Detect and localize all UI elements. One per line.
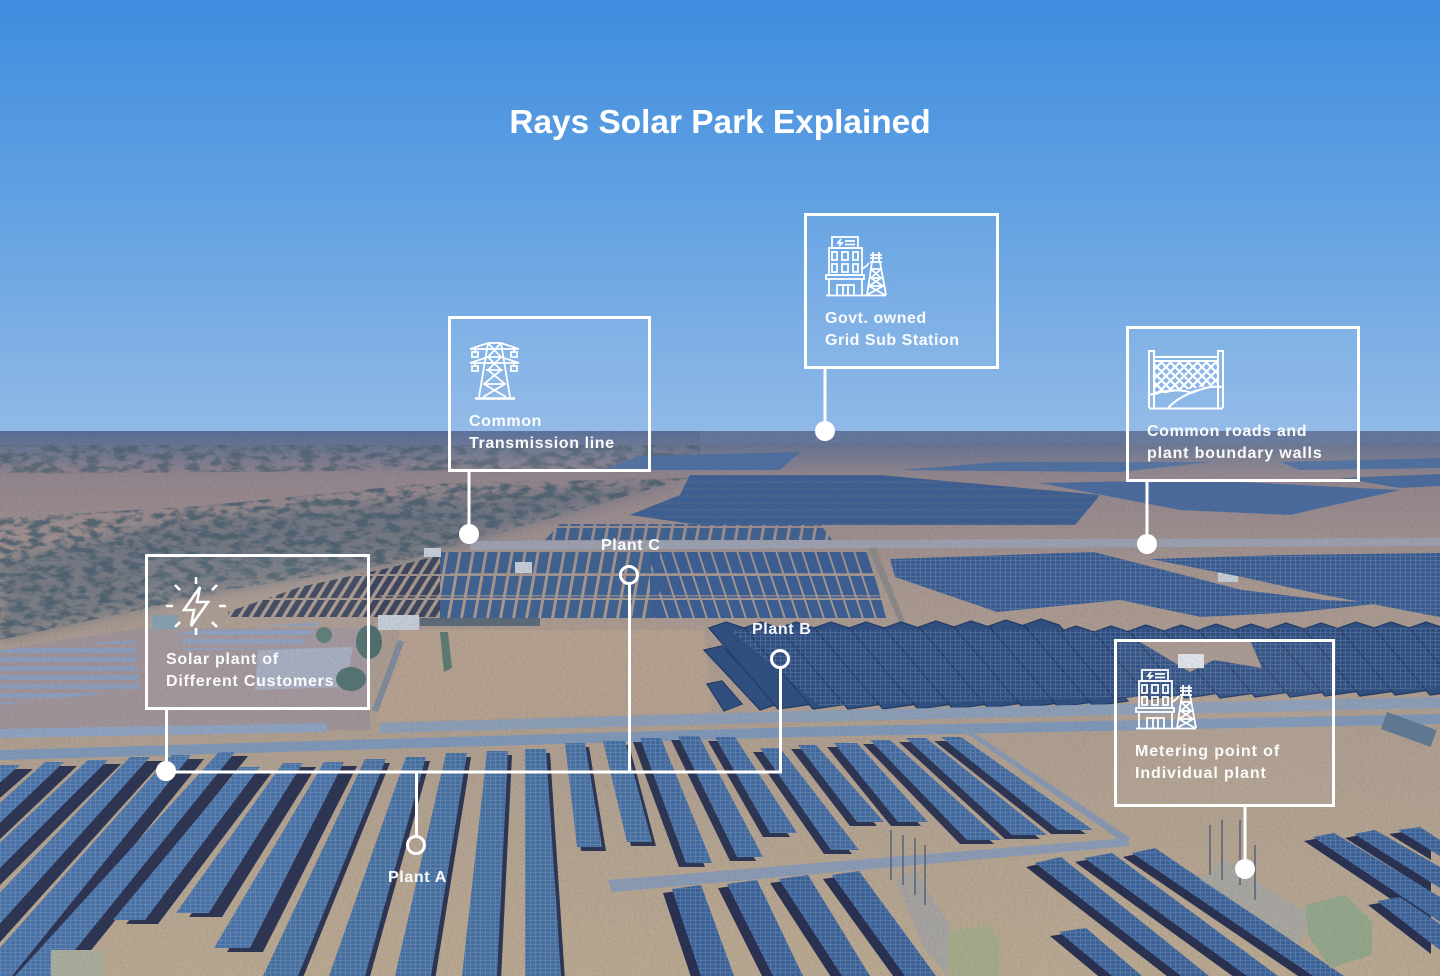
tree belt <box>0 470 700 640</box>
boundary walls <box>0 697 1440 892</box>
text: solar plant of different customers: Different Customers <box>166 673 334 690</box>
connector: plant network <box>156 566 788 854</box>
far solar fields <box>545 474 1440 540</box>
panel: common roads and boundary walls <box>1128 328 1358 480</box>
icon: substation building <box>826 237 886 296</box>
text: common roads and boundary walls: plant boundary walls <box>1147 445 1323 462</box>
connector: metering point <box>1235 807 1255 879</box>
icon: lightning bolt with rays <box>166 577 226 635</box>
icon: fence with lattice <box>1149 351 1223 408</box>
text: common transmission line: Transmission line <box>469 435 615 452</box>
node: plant A <box>408 836 424 854</box>
icon: metering building <box>1136 670 1196 728</box>
plant B array <box>704 619 1440 711</box>
panel: common transmission line <box>450 318 650 470</box>
text: metering point of individual plant: Individual plant <box>1135 765 1267 782</box>
label: plant B: Plant B <box>752 621 811 638</box>
node: plant C <box>620 566 638 584</box>
label: plant A: Plant A <box>388 869 447 886</box>
text: common roads and boundary walls: Common roads and <box>1147 423 1307 440</box>
title: Rays Solar Park Explained <box>509 104 931 141</box>
panel: solar plant of different customers <box>146 556 368 708</box>
left service yard <box>0 615 382 730</box>
ground <box>0 431 1440 976</box>
connector: roads and walls <box>1137 482 1157 554</box>
sand yard <box>375 630 712 722</box>
front solar rows with shadows <box>0 756 357 976</box>
connector: transmission line <box>459 472 479 544</box>
text: govt grid sub station: Govt. owned <box>825 310 927 327</box>
sky background <box>0 0 1440 432</box>
panel: metering point of individual plant <box>1116 640 1334 806</box>
aerial photo of solar park <box>0 431 1440 976</box>
connector: grid sub station <box>815 369 835 441</box>
substations <box>51 820 1372 976</box>
horizon scrub <box>0 445 700 475</box>
huts <box>378 548 1238 630</box>
access road <box>470 538 1440 550</box>
text: solar plant of different customers: Solar plant of <box>166 651 279 668</box>
plant C array <box>228 548 906 625</box>
panel: govt grid sub station <box>806 214 998 368</box>
text: common transmission line: Common <box>469 413 542 430</box>
white control room <box>1178 654 1204 668</box>
right mid arrays <box>890 552 1440 617</box>
label: plant C: Plant C <box>601 537 660 554</box>
icon: transmission tower <box>470 343 519 398</box>
text: metering point of individual plant: Metering point of <box>1135 743 1280 760</box>
plant B panel texture <box>730 628 1440 706</box>
photo grain <box>0 431 1440 976</box>
text: govt grid sub station: Grid Sub Station <box>825 332 960 349</box>
node: plant B <box>772 650 788 668</box>
far right horizon strips <box>600 431 1440 472</box>
